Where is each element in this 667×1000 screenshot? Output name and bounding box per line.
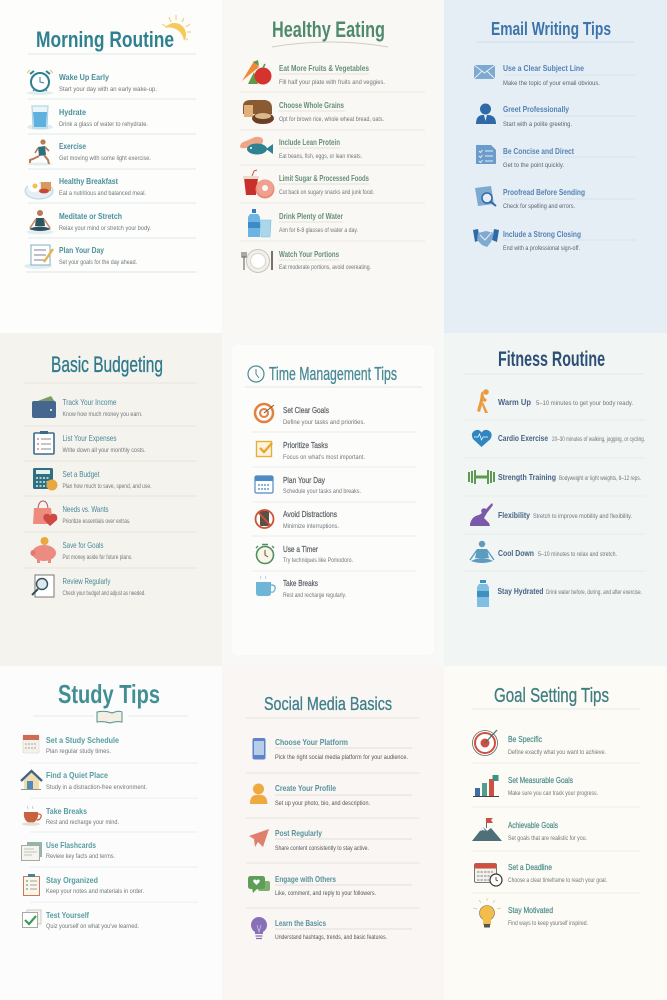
item: stay motivated: Find ways to keep yourself inspired. xyxy=(508,920,588,927)
icon: document and magnifier xyxy=(475,186,496,206)
item: achievable goals xyxy=(472,818,587,842)
item: clear subject line: Make the topic of your email obvious. xyxy=(503,80,600,87)
item: avoid distractions: Minimize interruptions. xyxy=(283,523,339,530)
item: take breaks: Rest and recharge regularly. xyxy=(283,592,346,599)
item: warm up xyxy=(477,389,633,413)
item: healthy breakfast: Eat a nutritious and balanced meal. xyxy=(59,190,146,197)
icon: soda and donut xyxy=(243,170,274,198)
icon: yellow light bulb xyxy=(473,898,501,928)
icon: dumbbell xyxy=(469,470,494,484)
icon: coffee cup xyxy=(22,806,41,826)
icon: alarm clock xyxy=(27,70,53,95)
item: flexibility: Flexibility xyxy=(498,510,530,520)
icon: runner xyxy=(27,139,53,166)
item: choose platform: Choose Your Platform xyxy=(275,737,348,747)
item: hydrate: Hydrate xyxy=(59,107,86,117)
item: clear goals: Set Clear Goals xyxy=(283,405,329,415)
panel: fitness routine xyxy=(444,333,667,666)
item: quiet place: Find a Quiet Place xyxy=(46,770,108,780)
item: drink water xyxy=(248,209,358,237)
icon: document checklist xyxy=(476,145,496,164)
item: track income: Know how much money you earn. xyxy=(62,411,143,418)
icon: plate and cutlery xyxy=(242,250,272,272)
item: greet professionally: Start with a polite greeting. xyxy=(503,121,572,128)
item: fruits and vegetables: Eat More Fruits & Vegetables xyxy=(279,63,369,73)
item: use a timer: Use a Timer xyxy=(283,544,318,554)
icon: checked papers xyxy=(22,910,41,928)
item: proofread: Proofread Before Sending xyxy=(503,187,585,197)
item: flexibility xyxy=(470,503,632,526)
item: choose platform xyxy=(252,737,412,761)
item: exercise: Get moving with some light exercise. xyxy=(59,155,151,162)
item: achievable goals: Achievable Goals xyxy=(508,820,558,830)
title: Time Management Tips xyxy=(269,364,397,384)
icon: calendar xyxy=(23,735,39,753)
item: hydrate: Drink a glass of water to rehydrate. xyxy=(59,121,148,128)
item: measurable goals xyxy=(473,775,598,797)
item: set a deadline: Choose a clear timeframe to reach your goal. xyxy=(508,877,607,884)
icon: person xyxy=(250,784,268,804)
item: set a budget: Plan how much to save, spend, and use. xyxy=(62,483,152,490)
panel: morning routine xyxy=(0,0,222,333)
item: strong closing: End with a professional sign-off. xyxy=(503,245,580,252)
item: flashcards: Review key facts and terms. xyxy=(46,853,115,860)
item: cool down: Cool Down xyxy=(498,548,534,558)
icon: checkbox xyxy=(256,442,272,456)
title: Morning Routine xyxy=(36,27,174,52)
icon: wallet xyxy=(32,396,56,418)
item: cool down: 5–10 minutes to relax and stretch. xyxy=(538,551,617,558)
item: exercise xyxy=(27,139,151,166)
item: test yourself xyxy=(22,910,139,930)
item: plan your day xyxy=(24,245,137,269)
item: be specific: Define exactly what you want to achieve. xyxy=(508,749,606,756)
item: lean protein: Eat beans, fish, eggs, or lean meats. xyxy=(279,153,362,160)
item: review regularly xyxy=(32,575,146,597)
item: whole grains: Choose Whole Grains xyxy=(279,100,344,110)
title: Study Tips xyxy=(58,679,160,709)
icon: envelope xyxy=(474,65,495,79)
item: take breaks xyxy=(256,576,346,599)
item: flashcards xyxy=(22,840,115,860)
item: lean protein: Include Lean Protein xyxy=(279,137,340,147)
item: create profile xyxy=(250,783,412,807)
item: avoid distractions xyxy=(256,509,339,530)
item: needs vs wants: Needs vs. Wants xyxy=(62,504,108,514)
item: clear subject line xyxy=(474,63,636,87)
icon: orange target xyxy=(255,404,274,422)
panel: social media basics xyxy=(222,666,444,1000)
item: limit sugar: Cut back on sugary snacks and junk food. xyxy=(279,189,374,196)
panel: email writing tips xyxy=(444,0,667,333)
title: Fitness Routine xyxy=(498,348,605,371)
panel: basic budgeting xyxy=(0,333,222,666)
item: healthy breakfast xyxy=(25,176,146,199)
icon: chat bubbles xyxy=(248,876,270,893)
item: save for goals: Put money aside for future plans. xyxy=(62,554,133,561)
item: warm up: 5–10 minutes to get your body ready. xyxy=(536,400,633,407)
icon: house xyxy=(21,771,42,790)
item: prioritize tasks xyxy=(256,440,365,461)
item: review regularly: Review Regularly xyxy=(62,576,111,586)
item: engage with others xyxy=(248,874,412,897)
icon: paper plane xyxy=(249,829,269,847)
title: Basic Budgeting xyxy=(51,352,163,377)
item: greet professionally: Greet Professionally xyxy=(503,104,569,114)
item: whole grains xyxy=(243,100,384,124)
item: save for goals: Save for Goals xyxy=(62,540,104,550)
item: save for goals xyxy=(30,537,133,563)
item: plan your day: Schedule your tasks and breaks. xyxy=(283,488,361,495)
item: cardio exercise: Cardio Exercise xyxy=(498,433,548,443)
item: fruits and vegetables: Fill half your plate with fruits and veggies. xyxy=(279,79,385,86)
title: Healthy Eating xyxy=(272,17,385,42)
item: stay organized xyxy=(24,874,144,896)
item: needs vs wants: Prioritize essentials over extras. xyxy=(62,518,131,525)
item: stay motivated xyxy=(473,898,588,928)
item: clear goals xyxy=(255,404,365,426)
icon: water bottle and glass xyxy=(248,209,271,237)
item: warm up: Warm Up xyxy=(498,397,531,407)
item: use a timer xyxy=(256,544,353,564)
item: plan your day: Plan Your Day xyxy=(283,475,326,485)
item: set a budget: Set a Budget xyxy=(62,469,100,479)
item: needs vs wants xyxy=(33,501,131,526)
icon: no phone xyxy=(256,510,274,528)
item: strong closing xyxy=(473,229,636,252)
icon: carrot and apple xyxy=(242,60,272,84)
item: take breaks: Take Breaks xyxy=(283,578,318,588)
item: healthy breakfast: Healthy Breakfast xyxy=(59,176,118,186)
item: use a timer: Try techniques like Pomodoro. xyxy=(283,557,353,564)
item: study schedule: Set a Study Schedule xyxy=(46,735,119,745)
item: post regularly xyxy=(249,828,412,852)
item: clear goals: Define your tasks and priorities. xyxy=(283,419,365,426)
item: take breaks xyxy=(22,806,119,826)
item: post regularly: Share content consistently to stay active. xyxy=(275,845,369,852)
icon: green timer xyxy=(256,544,274,564)
item: create profile: Set up your photo, bio, and description. xyxy=(275,800,370,807)
item: wake up early: Wake Up Early xyxy=(59,72,109,82)
icon: handshake xyxy=(473,229,499,247)
item: quiet place: Study in a distraction-free environment. xyxy=(46,784,147,791)
item: cool down xyxy=(470,541,617,563)
item: take breaks: Take Breaks xyxy=(46,806,87,816)
item: lean protein xyxy=(240,137,362,160)
item: plan your day: Set your goals for the day ahead. xyxy=(59,259,137,266)
item: proofread xyxy=(475,186,636,210)
item: engage with others: Engage with Others xyxy=(275,874,336,884)
icon: clipboard xyxy=(34,431,54,454)
item: wake up early xyxy=(27,70,157,95)
item: test yourself: Test Yourself xyxy=(46,910,89,920)
panel: goal setting tips xyxy=(444,666,667,1000)
item: hydrate xyxy=(27,106,148,130)
item: exercise: Exercise xyxy=(59,141,86,151)
item: set a deadline xyxy=(474,862,607,886)
panel: healthy eating xyxy=(222,0,444,333)
item: wake up early: Start your day with an early wake-up. xyxy=(59,86,157,93)
item: concise and direct xyxy=(476,145,636,169)
icon: orange stretching figure xyxy=(477,389,489,413)
panel: study tips xyxy=(0,666,222,1000)
icon: calendar xyxy=(255,476,273,493)
item: watch portions: Eat moderate portions, avoid overeating. xyxy=(279,264,371,271)
icon: clock xyxy=(248,366,264,382)
item: measurable goals: Make sure you can track your progress. xyxy=(508,790,598,797)
icon: clipboard xyxy=(24,874,40,896)
icon: sun xyxy=(162,15,191,41)
item: track income xyxy=(32,396,143,418)
item: prioritize tasks: Prioritize Tasks xyxy=(283,440,328,450)
item: greet professionally xyxy=(476,104,636,128)
icon: heart with pulse xyxy=(472,430,492,447)
item: stay motivated: Stay Motivated xyxy=(508,905,553,915)
item: choose platform: Pick the right social media platform for your audience. xyxy=(275,754,408,761)
item: plan your day xyxy=(255,475,361,495)
item: drink water: Drink Plenty of Water xyxy=(279,211,344,221)
item: study schedule xyxy=(23,735,119,755)
item: post regularly: Post Regularly xyxy=(275,828,322,838)
title: Social Media Basics xyxy=(264,693,392,714)
item: stay hydrated: Stay Hydrated xyxy=(498,586,544,596)
icon: open book xyxy=(97,711,122,723)
item: learn the basics xyxy=(251,917,412,941)
item: concise and direct: Get to the point quickly. xyxy=(503,162,564,169)
icon: professional person xyxy=(476,104,496,124)
icon: water glass xyxy=(27,106,53,130)
item: list expenses: Write down all your monthly costs. xyxy=(62,447,146,454)
item: cardio exercise xyxy=(472,430,645,447)
icon: report and magnifier xyxy=(32,575,54,597)
icon: bread and grain bowl xyxy=(243,100,274,124)
item: learn the basics: Understand hashtags, trends, and basic features. xyxy=(275,934,387,941)
icon: bag and heart xyxy=(33,501,57,526)
icon: smartphone xyxy=(252,738,266,760)
item: meditate or stretch xyxy=(27,210,151,234)
item: whole grains: Opt for brown rice, whole wheat bread, oats. xyxy=(279,116,384,123)
icon: chicken and fish xyxy=(240,137,273,154)
item: achievable goals: Set goals that are realistic for you. xyxy=(508,835,587,842)
item: set a budget xyxy=(33,468,152,490)
icon: meditating person xyxy=(27,210,53,234)
item: limit sugar xyxy=(243,170,374,198)
item: learn the basics: Learn the Basics xyxy=(275,918,326,928)
icon: mountain flag xyxy=(472,818,502,841)
icon: calculator and coin xyxy=(33,468,58,490)
icon: red target xyxy=(472,730,498,756)
icon: breakfast plate xyxy=(25,180,53,199)
item: meditate or stretch: Relax your mind or stretch your body. xyxy=(59,225,151,232)
icon: light bulb xyxy=(251,917,267,938)
item: be specific xyxy=(472,730,606,756)
icon: blue meditating figure xyxy=(470,541,494,563)
item: flexibility: Stretch to improve mobility and flexibility. xyxy=(533,513,632,520)
item: fruits and vegetables xyxy=(242,60,385,86)
item: strength training: Strength Training xyxy=(498,472,556,482)
title: Goal Setting Tips xyxy=(494,685,609,707)
item: list expenses xyxy=(34,431,146,454)
icon: purple stretching figure xyxy=(470,503,493,526)
item: stay organized: Keep your notes and materials in order. xyxy=(46,888,144,895)
icon: calendar and clock xyxy=(474,864,502,886)
item: study schedule: Plan regular study times. xyxy=(46,748,111,755)
item: quiet place xyxy=(21,770,147,791)
item: create profile: Create Your Profile xyxy=(275,783,336,793)
item: track income: Track Your Income xyxy=(62,397,117,407)
item: limit sugar: Limit Sugar & Processed Foods xyxy=(279,173,369,183)
item: be specific: Be Specific xyxy=(508,734,543,744)
item: strong closing: Include a Strong Closing xyxy=(503,229,581,239)
item: stay hydrated xyxy=(477,580,642,607)
item: flashcards: Use Flashcards xyxy=(46,840,96,850)
item: engage with others: Like, comment, and reply to your followers. xyxy=(275,890,376,897)
item: drink water: Aim for 6-8 glasses of water a day. xyxy=(279,227,358,234)
item: clear subject line: Use a Clear Subject Line xyxy=(503,63,584,73)
icon: flashcards xyxy=(22,842,42,860)
title: Email Writing Tips xyxy=(491,19,611,39)
item: plan your day: Plan Your Day xyxy=(59,245,104,255)
icon: blue mug xyxy=(256,576,275,596)
item: review regularly: Check your budget and adjust as needed. xyxy=(62,590,146,597)
item: watch portions: Watch Your Portions xyxy=(279,249,339,259)
item: avoid distractions: Avoid Distractions xyxy=(283,509,337,519)
item: strength training xyxy=(469,470,641,484)
item: test yourself: Quiz yourself on what you've learned. xyxy=(46,923,139,930)
item: set a deadline: Set a Deadline xyxy=(508,862,552,872)
item: prioritize tasks: Focus on what's most important. xyxy=(283,454,365,461)
item: watch portions xyxy=(242,249,371,272)
item: proofread: Check for spelling and errors. xyxy=(503,203,575,210)
item: concise and direct: Be Concise and Direct xyxy=(503,146,574,156)
icon: water bottle xyxy=(477,580,489,607)
icon: piggy bank xyxy=(30,537,56,563)
item: list expenses: List Your Expenses xyxy=(62,433,116,443)
icon: bar chart xyxy=(473,775,499,796)
item: measurable goals: Set Measurable Goals xyxy=(508,775,573,785)
icon: checklist and pencil xyxy=(24,245,53,269)
item: meditate or stretch: Meditate or Stretch xyxy=(59,211,122,221)
item: stay organized: Stay Organized xyxy=(46,875,98,885)
item: take breaks: Rest and recharge your mind. xyxy=(46,819,119,826)
panel: time management tips xyxy=(222,333,444,666)
